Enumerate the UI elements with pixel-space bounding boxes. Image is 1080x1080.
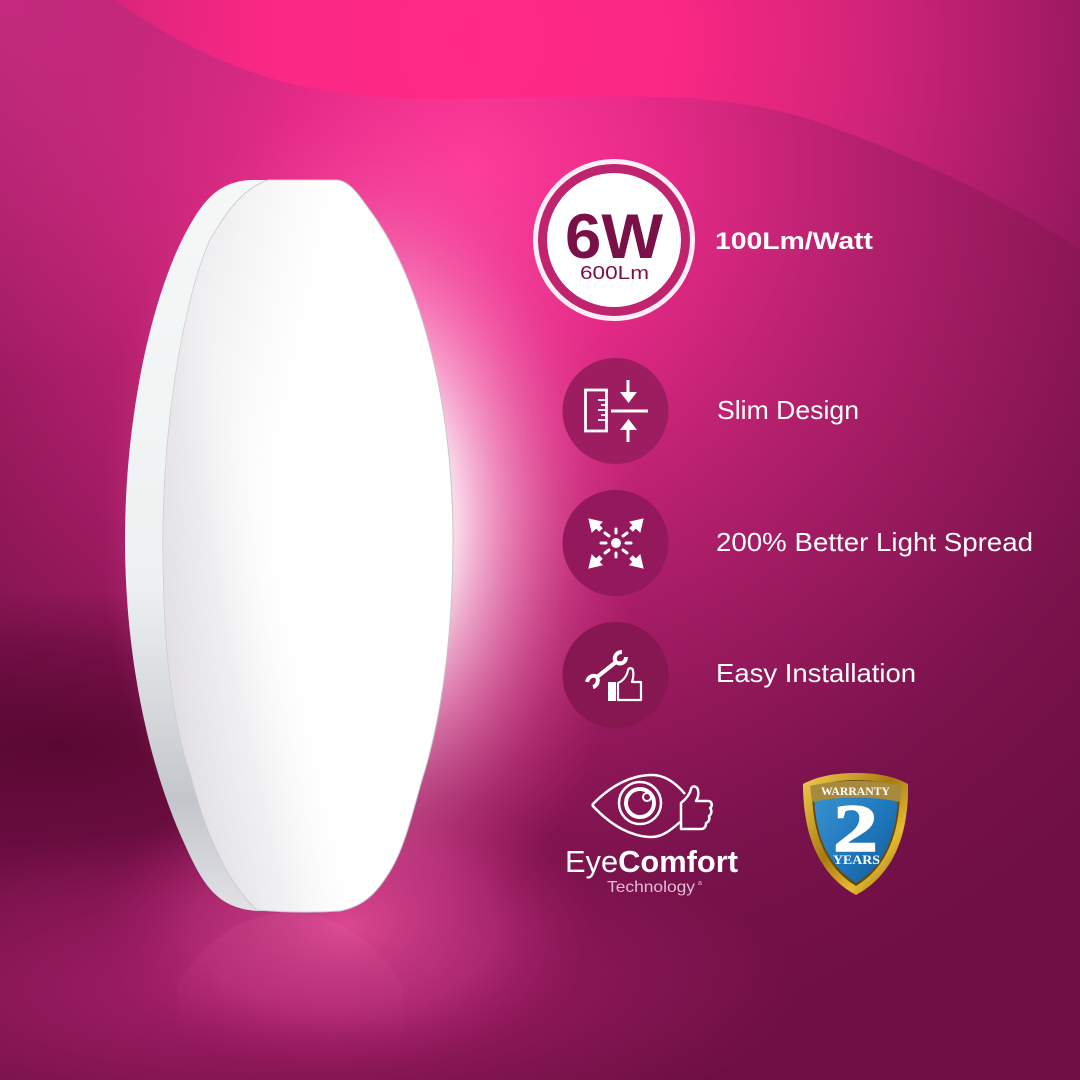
label: slim design: Slim Design bbox=[717, 395, 859, 425]
icon: easy installation bbox=[562, 622, 668, 728]
label: light spread: 200% Better Light Spread bbox=[716, 527, 1033, 557]
label: easy installation: Easy Installation bbox=[716, 658, 916, 688]
logo: EyeComfort Technology: EyeComfort bbox=[565, 844, 738, 879]
badge: 2 years warranty shield: WARRANTY bbox=[821, 784, 890, 798]
logo: EyeComfort Technology: a bbox=[698, 880, 702, 887]
lamp back rim bbox=[125, 180, 300, 911]
icon: light spread bbox=[562, 490, 668, 596]
badge: 6W 600Lm bbox=[536, 162, 692, 318]
badge: 6W 600Lm: 6W bbox=[565, 202, 664, 272]
badge: 6W 600Lm: 600Lm bbox=[580, 263, 649, 283]
badge: 2 years warranty shield bbox=[803, 773, 908, 895]
label: 100Lm/Watt: 100Lm/Watt bbox=[715, 228, 873, 255]
badge: 2 years warranty shield: 2 bbox=[833, 790, 878, 866]
product: round LED ceiling light bbox=[125, 180, 453, 912]
badge: 2 years warranty shield: YEARS bbox=[833, 853, 880, 867]
icon: slim design bbox=[562, 358, 668, 464]
logo: EyeComfort Technology: Technology bbox=[607, 879, 695, 896]
logo: EyeComfort Technology bbox=[565, 775, 738, 896]
icon: eye with thumb bbox=[592, 775, 712, 837]
lamp front diffuser bbox=[163, 180, 453, 912]
